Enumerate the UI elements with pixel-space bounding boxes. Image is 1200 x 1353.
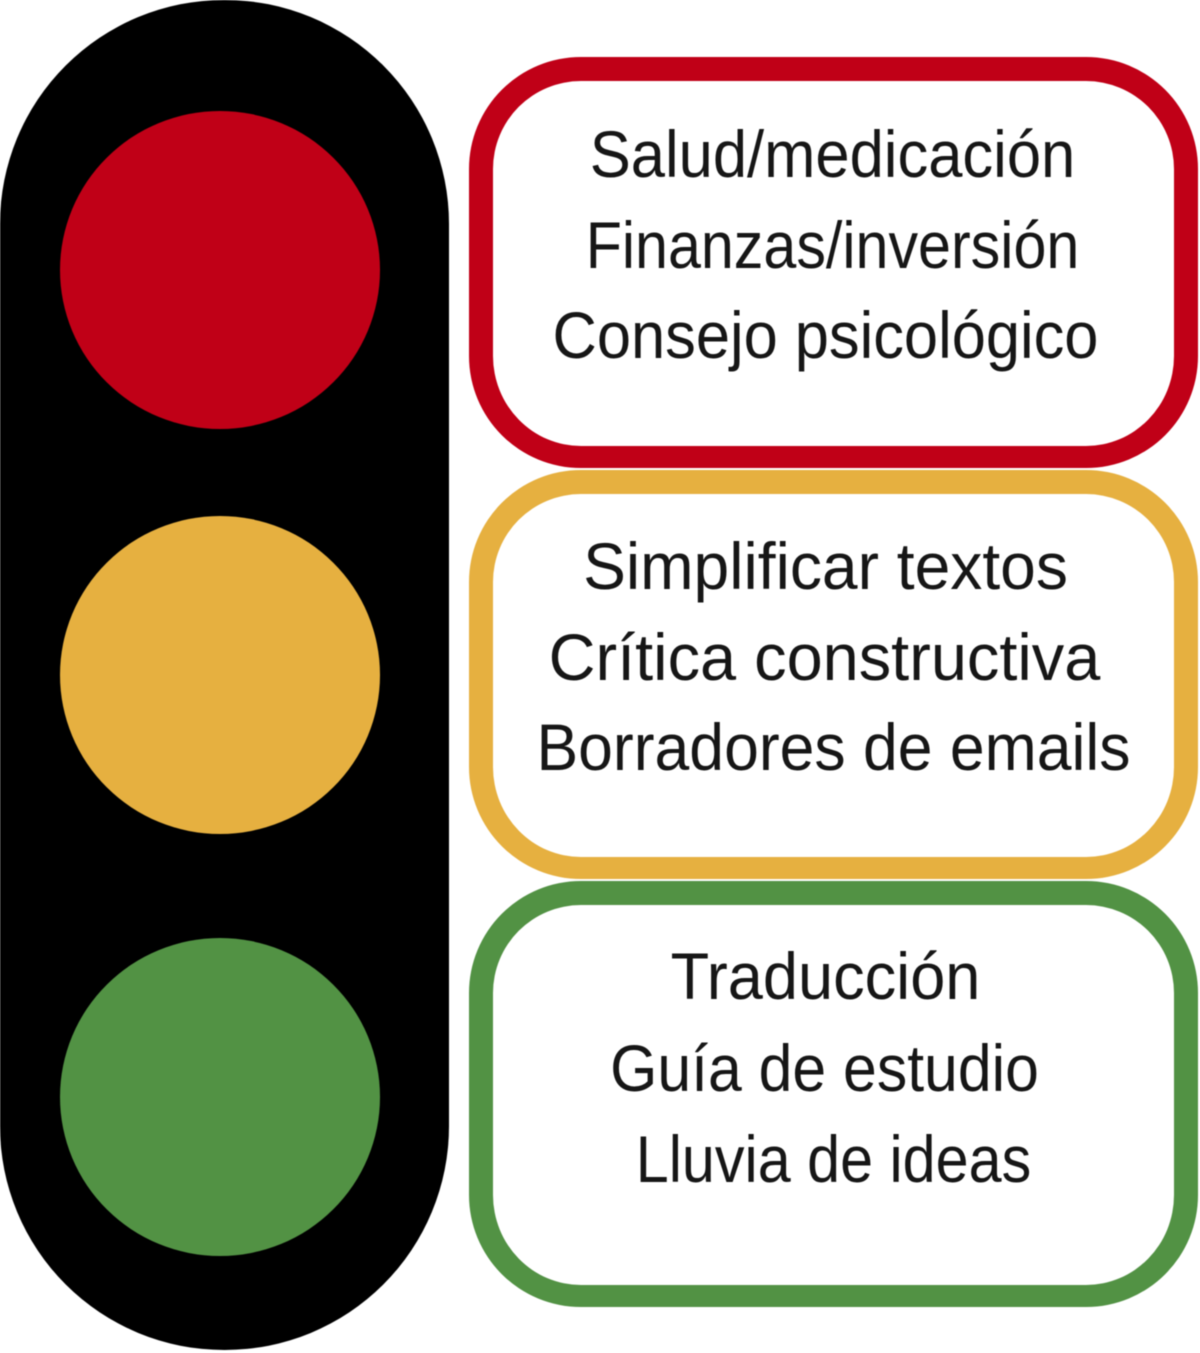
text: psychological advice: Consejo psicológico — [552, 298, 1098, 372]
red border box — [469, 57, 1198, 468]
text: study guide: Guía de estudio — [610, 1031, 1039, 1105]
text: health: Salud/medicación — [589, 117, 1075, 191]
green border box — [469, 881, 1198, 1307]
text: simplify texts: Simplificar textos — [583, 529, 1067, 603]
panel: red high-risk uses — [468, 56, 1199, 469]
red light — [60, 111, 380, 429]
text: email drafts: Borradores de emails — [536, 710, 1130, 784]
text: translation: Traducción — [671, 939, 980, 1013]
panel: amber caution uses — [468, 469, 1199, 880]
green light — [60, 938, 380, 1256]
amber border box — [469, 470, 1198, 879]
traffic light housing — [0, 0, 449, 1350]
amber light — [60, 516, 380, 834]
traffic light — [0, 0, 450, 1351]
panel: green safe uses — [468, 880, 1199, 1308]
text: finance: Finanzas/inversión — [585, 208, 1079, 282]
text: constructive criticism: Crítica constructiva — [549, 620, 1100, 694]
text: brainstorming: Lluvia de ideas — [635, 1122, 1031, 1196]
